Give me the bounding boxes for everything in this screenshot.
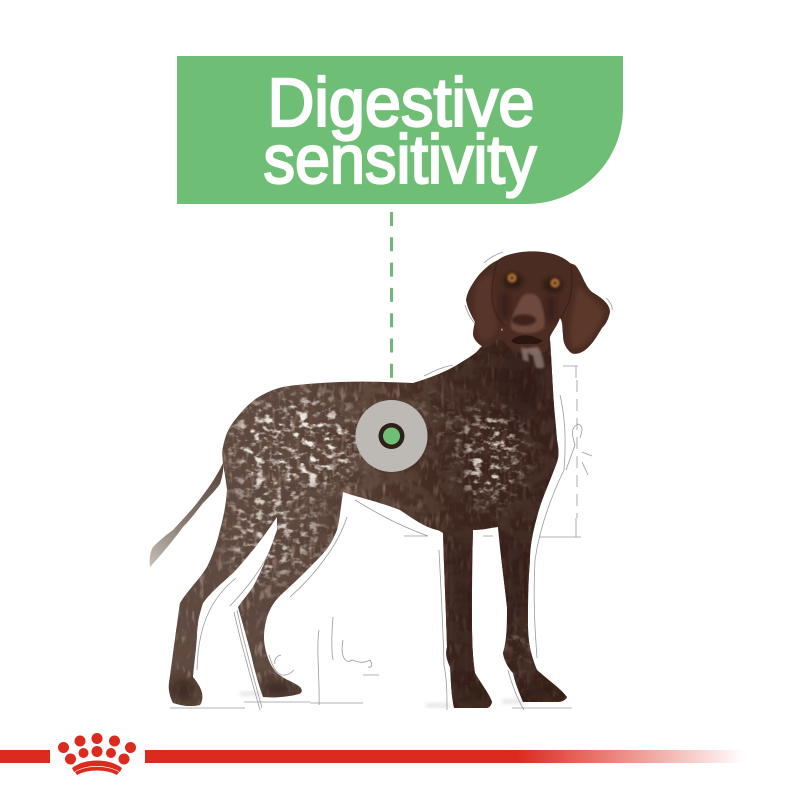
- beard: [521, 347, 544, 368]
- pale flank and chest flecks: [215, 384, 538, 680]
- red bar right: [145, 750, 745, 763]
- title: Digestive sensitivity: [264, 64, 537, 198]
- brand footer: [0, 733, 745, 775]
- tail: [150, 463, 223, 567]
- ear folds: [492, 262, 572, 328]
- highlight circle: [356, 400, 428, 472]
- dark fur mottling: [168, 350, 564, 708]
- ground shadows: [240, 692, 524, 707]
- dark leg and neck shading: [169, 345, 558, 705]
- nose: [512, 314, 536, 326]
- banner shape: [177, 56, 623, 204]
- digestion marker: [356, 212, 428, 472]
- eye sockets: [500, 273, 563, 322]
- target ring: [378, 423, 404, 449]
- red bar left: [0, 750, 50, 763]
- ear tone left: [474, 272, 497, 340]
- dog illustration: [140, 240, 620, 720]
- muzzle: [511, 294, 545, 333]
- head: [466, 251, 610, 368]
- title: Digestive sensitivity: Digestive: [268, 64, 534, 141]
- head silhouette with ears: [466, 251, 610, 355]
- warm fur streaks: [174, 340, 566, 706]
- target dot: [383, 428, 400, 444]
- head shading: [474, 262, 604, 348]
- ear tone right: [570, 285, 604, 348]
- title: Digestive sensitivity: sensitivity: [264, 121, 537, 198]
- dog body: [168, 330, 567, 708]
- eyes: [508, 274, 560, 288]
- title banner: [177, 56, 623, 204]
- pencil sketch marks: [170, 252, 612, 710]
- icon: crown: [58, 733, 136, 775]
- dashed leader line: [390, 212, 393, 378]
- mouth: [511, 335, 543, 344]
- darker front half: [397, 340, 567, 708]
